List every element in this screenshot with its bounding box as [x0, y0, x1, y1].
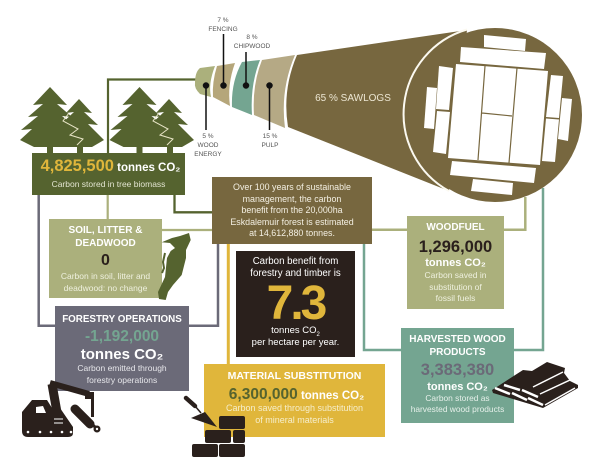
panel: central summary: Over 100 years of sustainable [233, 182, 351, 192]
caption: harvested wood products [411, 404, 504, 414]
panel: tree biomass [32, 153, 185, 195]
caption: fossil fuels [436, 293, 475, 303]
segment: wood energy [195, 66, 215, 97]
heading: DEADWOOD [75, 238, 136, 249]
value: tree biomass: 4,825,500 tonnes CO₂ [41, 157, 180, 175]
label: 15% pulp [262, 133, 278, 149]
panel: forestry operations [55, 306, 189, 391]
value: -1,192,000 [85, 328, 159, 345]
unit text [252, 325, 339, 348]
caption: Carbon emitted through [77, 363, 167, 373]
panel: soil, litter and deadwood [49, 219, 162, 298]
segment: chipwood [232, 60, 260, 115]
unit: tonnes CO₂ [425, 257, 486, 269]
unit text: per hectare per year. [252, 337, 339, 348]
panel: central summary: benefit from the 20,000ha [241, 205, 343, 215]
heading: PRODUCTS [429, 347, 486, 358]
marker lines [204, 34, 272, 130]
caption: Carbon stored in tree biomass [52, 179, 165, 189]
caption: Carbon saved in [425, 270, 486, 280]
caption: Carbon in soil, litter and [61, 271, 150, 281]
heading: WOODFUEL [426, 222, 485, 233]
label: 5% wood energy: ENERGY [194, 151, 222, 158]
caption: forestry operations [87, 375, 157, 385]
value: 3,383,380 [421, 361, 494, 379]
unit: tonnes CO₂ [81, 346, 163, 363]
caption [77, 363, 167, 385]
panel: material substitution [204, 364, 385, 437]
segment: fencing [213, 63, 235, 106]
sawn timber cross-section [424, 35, 572, 195]
label: 8% chipwood [234, 34, 270, 50]
caption: Carbon saved through substitution [226, 403, 363, 413]
big value: 7.3 [267, 277, 324, 330]
caption: of mineral materials [255, 415, 334, 425]
label: 65% sawlogs: 65 % SAWLOGS [315, 93, 391, 104]
segment: pulp [254, 55, 295, 128]
heading: FORESTRY OPERATIONS [62, 314, 182, 325]
panel: central summary: management, the carbon [243, 194, 341, 204]
caption [226, 403, 363, 425]
unit text: tonnes CO2 [271, 325, 320, 338]
intro text: forestry and timber is [250, 268, 341, 279]
heading: MATERIAL SUBSTITUTION [228, 370, 361, 382]
caption [424, 270, 486, 303]
intro text: Carbon benefit from [253, 256, 338, 267]
label: 7% fencing: FENCING [208, 26, 238, 33]
heading [68, 225, 142, 249]
value: 1,296,000 [419, 238, 492, 256]
heading [409, 334, 506, 358]
caption: deadwood: no change [64, 283, 147, 293]
panel: carbon benefit per hectare [236, 251, 355, 357]
label: 7% fencing: 7 % [217, 17, 229, 24]
label: 5% wood energy: WOOD [198, 142, 218, 149]
panel: central summary [212, 177, 372, 244]
panel: woodfuel [407, 216, 504, 309]
label: 15% pulp: PULP [262, 142, 278, 149]
intro text [250, 256, 341, 279]
label: 8% chipwood: CHIPWOOD [234, 43, 270, 50]
caption [411, 393, 504, 414]
heading: SOIL, LITTER & [69, 225, 142, 236]
caption [61, 271, 150, 293]
panel: harvested wood products [401, 328, 514, 423]
label: 7% fencing [208, 17, 238, 33]
panel: central summary: at 14,612,880 tonnes. [249, 228, 335, 238]
value: 0 [101, 252, 110, 269]
label: 8% chipwood: 8 % [246, 34, 258, 41]
caption: substitution of [429, 282, 482, 292]
segment: sawlogs [286, 30, 467, 191]
unit: tonnes CO₂ [427, 381, 488, 393]
value: 6,300,000 tonnes CO₂ [229, 386, 364, 403]
label: 5% wood energy: 5 % [202, 133, 214, 140]
caption: Carbon stored as [425, 393, 490, 403]
label: 15% pulp: 15 % [263, 133, 277, 140]
panel: central summary: Eskdalemuir forest is estimated [230, 216, 354, 226]
label: 5% wood energy [194, 133, 222, 158]
heading: HARVESTED WOOD [409, 334, 506, 345]
